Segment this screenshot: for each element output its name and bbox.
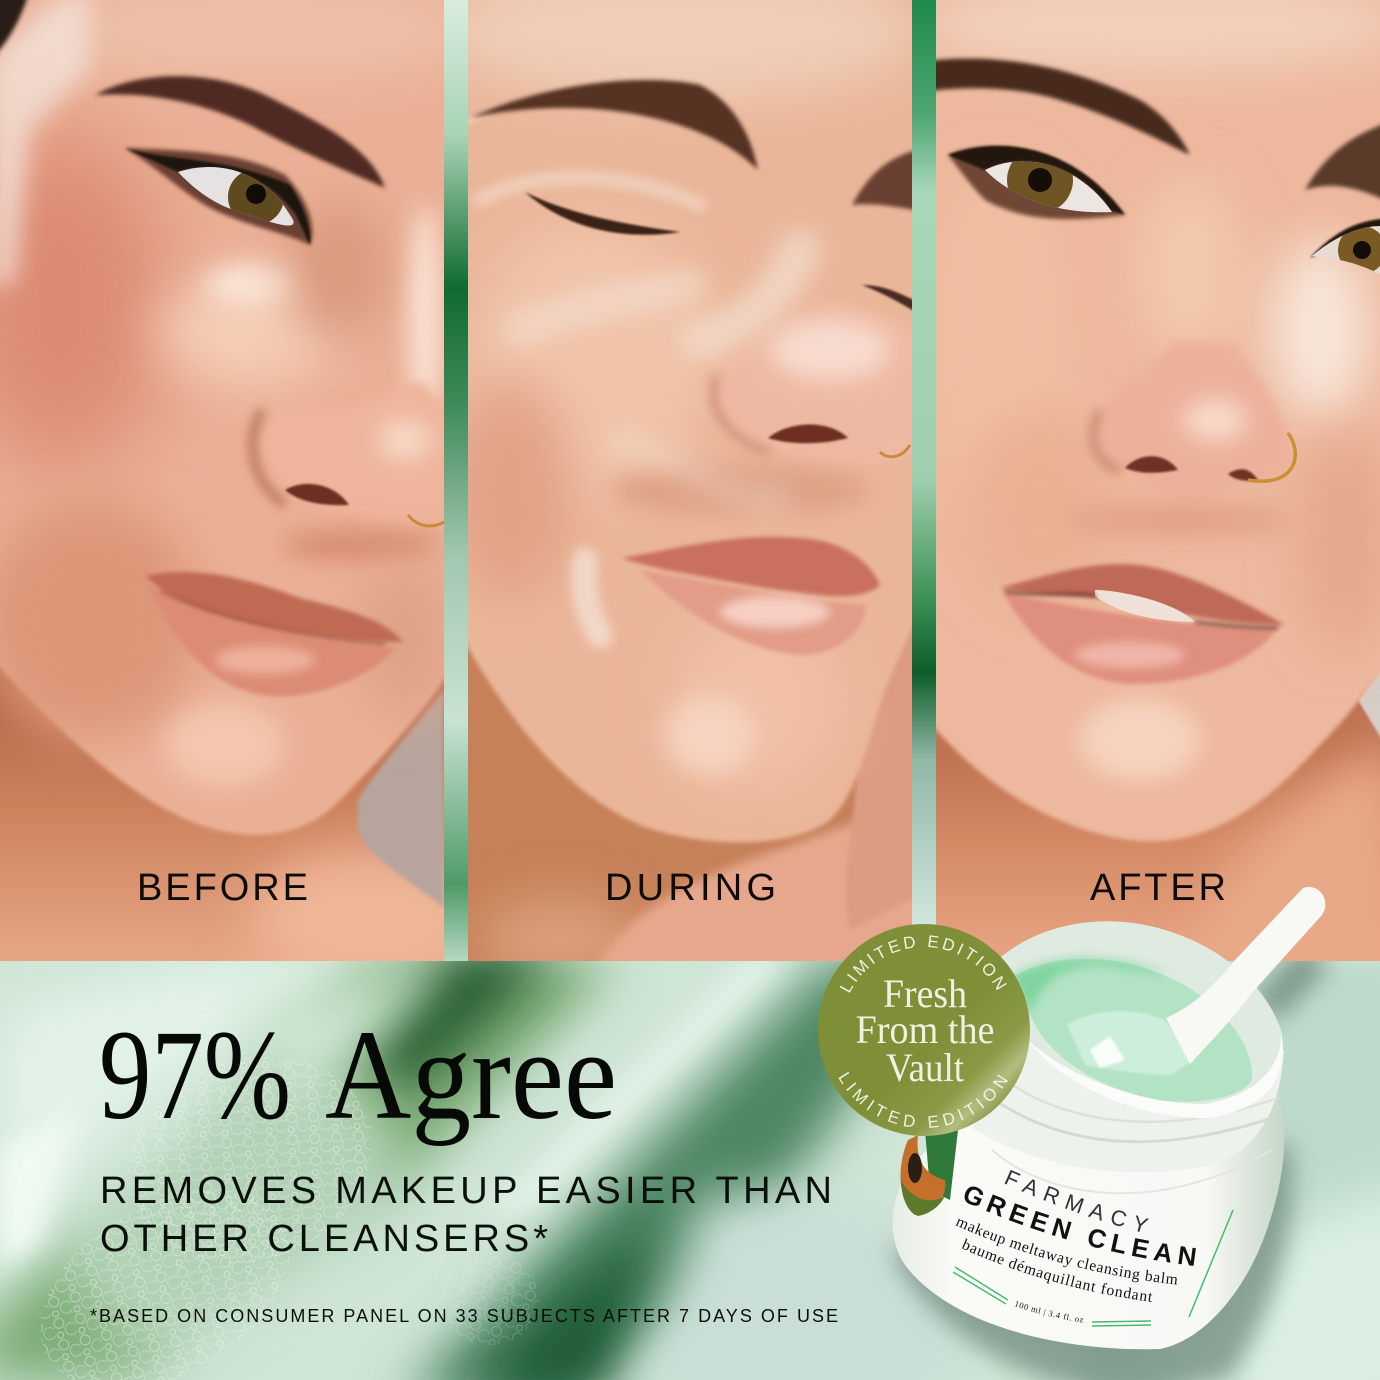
panel: green gel background [0, 945, 1380, 1380]
panel: before face [0, 0, 444, 961]
badge title: Vault [886, 1045, 964, 1090]
eye [948, 146, 1125, 219]
label green lines [953, 1210, 1233, 1326]
nose shape [1085, 340, 1284, 477]
badge: fresh from the vault [818, 924, 1030, 1136]
label text: GREEN CLEAN [964, 1186, 1196, 1266]
footnote: *BASED ON CONSUMER PANEL ON 33 SUBJECTS AFTER 7 DAYS OF USE [90, 1306, 838, 1326]
label text: FARMACY [1004, 1170, 1149, 1232]
jar rim [1001, 921, 1283, 1118]
subheading: REMOVES MAKEUP EASIER THAN [100, 1170, 832, 1212]
balm [1012, 959, 1252, 1102]
closed eye [525, 192, 680, 235]
badge title [856, 971, 994, 1090]
eyebrow [95, 76, 385, 188]
label: during: DURING [605, 867, 776, 909]
jar cast shadow [890, 1140, 1292, 1380]
panel: after face [910, 0, 1380, 980]
lips [622, 537, 880, 655]
headline [99, 1004, 617, 1146]
second eyebrow [850, 148, 912, 213]
balm scoop [1067, 1011, 1195, 1075]
jar neck [972, 1040, 1284, 1172]
nose shape [706, 302, 912, 458]
headline: Agree [325, 1004, 617, 1146]
nose ring [408, 515, 444, 526]
badge ring text [838, 935, 1008, 1128]
headline: 97% [99, 1004, 291, 1146]
divider strip: green gel left [444, 0, 468, 961]
lips [1000, 564, 1285, 684]
spatula cast shadow [1250, 945, 1330, 1020]
label text [955, 1170, 1196, 1322]
jar body [893, 1090, 1284, 1349]
foam bubbles [6, 993, 540, 1380]
nostril [768, 424, 848, 443]
divider strip: green gel right [912, 0, 936, 961]
eyebrow [470, 80, 758, 170]
panel: during face [468, 0, 912, 961]
subheading: OTHER CLEANSERS* [100, 1218, 548, 1260]
eye [125, 148, 312, 245]
second closed eye [862, 284, 912, 312]
nostril [285, 484, 349, 505]
nose ring [1248, 433, 1295, 481]
second eye [1310, 218, 1380, 274]
papaya illustration [901, 1130, 958, 1216]
label: after: AFTER [1090, 867, 1226, 909]
second eyebrow [1305, 120, 1380, 205]
eyebrow [920, 58, 1190, 155]
label text: 100 ml | 3.4 fl. oz [1014, 1301, 1083, 1322]
badge title: From the [856, 1007, 994, 1052]
foam streaks [470, 98, 800, 635]
label: before: BEFORE [137, 867, 308, 909]
nose ring [880, 445, 910, 457]
nostrils [1125, 456, 1258, 481]
label text: makeup meltaway cleansing balm [955, 1218, 1177, 1285]
label text: baume démaquillant fondant [962, 1238, 1152, 1302]
lips [145, 572, 403, 697]
spatula [1166, 887, 1325, 1064]
subheading [100, 1170, 832, 1260]
badge title: Fresh [883, 971, 967, 1016]
badge ring text: LIMITED EDITION [838, 1072, 1008, 1128]
product jar [892, 886, 1326, 1350]
badge ring text: LIMITED EDITION [840, 935, 1007, 993]
nose shape [243, 378, 444, 511]
